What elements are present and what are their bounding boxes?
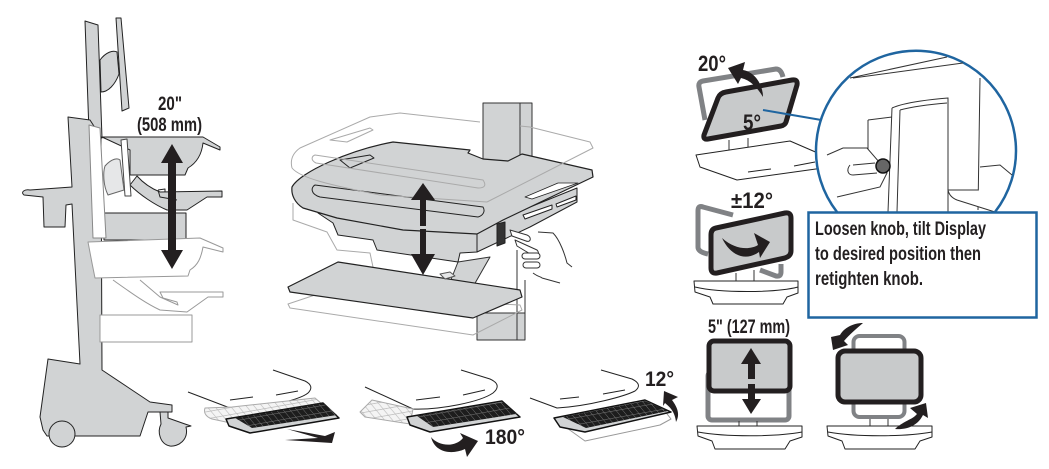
ghost display: [708, 372, 789, 420]
panel: tray height adjustment: [288, 103, 593, 340]
instruction text: [815, 219, 986, 290]
shelf: [696, 141, 827, 180]
shelf: [697, 426, 802, 449]
arrow: up down: [741, 348, 761, 414]
arrow: tilt: [728, 62, 763, 97]
hand on knob: [827, 148, 887, 197]
arrow: tray height: [411, 183, 435, 275]
shelf: [694, 281, 798, 304]
white mast highlight: [89, 125, 106, 238]
ghost keyboard: [360, 400, 413, 424]
magnifier circle: [816, 51, 1016, 212]
display: [838, 351, 921, 402]
panel: display height: [697, 317, 802, 449]
arrow: rotate upper: [831, 323, 863, 350]
arrow: tilt: [663, 391, 678, 422]
panel: display swivel: [694, 188, 798, 304]
keys: [563, 401, 668, 428]
column: [477, 103, 532, 340]
desk edge: [365, 370, 497, 409]
arrow: swivel: [722, 233, 770, 258]
display: [709, 341, 790, 391]
instruction text: to desired position then: [815, 244, 981, 265]
label: 20 inch travel: 20": [158, 94, 182, 115]
keyboard tray: [407, 401, 520, 432]
label: plus minus 12 degrees: ±12°: [731, 188, 773, 213]
panel: knob detail callout: [763, 51, 1036, 317]
post: [739, 421, 757, 426]
posts: [870, 419, 888, 426]
upper tray position: [102, 137, 220, 175]
panel: display tilt: [696, 51, 827, 180]
label: 180 degrees: 180°: [485, 426, 525, 449]
label: 5 degrees: 5°: [743, 110, 761, 135]
arm: [450, 257, 490, 285]
main work surface: [292, 142, 593, 234]
tray underside: [318, 213, 480, 262]
release handle: [497, 222, 505, 246]
label: 20 degrees: 20°: [698, 51, 726, 76]
instruction box: [808, 212, 1036, 318]
knob: [876, 159, 890, 173]
ghost keyboard: [205, 398, 322, 425]
keyboard shelf ghost: [288, 295, 522, 335]
ghost upper tray: [291, 113, 593, 202]
ghost display: [699, 69, 783, 120]
arrow: slide: [285, 429, 335, 443]
arrow: tray height: [161, 144, 183, 269]
panel: keyboard rotate: [360, 370, 525, 457]
hand: [510, 230, 572, 283]
instruction text: retighten knob.: [815, 269, 923, 290]
desk edge: [530, 370, 638, 408]
panel: keyboard tilt: [530, 368, 678, 441]
panel: cart side view: [23, 18, 223, 447]
label: 5 inch travel: 5" (127 mm): [708, 317, 790, 338]
panel: keyboard slide: [188, 370, 339, 443]
keyboard shelf: [288, 262, 522, 318]
keys: [235, 403, 337, 428]
front handle slot: [312, 185, 484, 217]
ghost display: [854, 336, 904, 417]
arrow: rotate: [431, 433, 478, 457]
other hand: [948, 165, 1012, 212]
panel: display rotation: [827, 323, 932, 449]
display: [711, 213, 791, 273]
shelf: [827, 426, 932, 449]
ghost display: [698, 206, 781, 276]
leader line: [763, 110, 833, 122]
label: 508 mm: (508 mm): [137, 115, 202, 136]
ghost keyboard outline: [560, 410, 671, 441]
cart parts: [850, 57, 980, 212]
desk edge: [188, 370, 311, 408]
keys: [417, 402, 517, 427]
label: 12 degrees: 12°: [645, 368, 674, 391]
arrow: rotate lower: [895, 403, 928, 429]
cart mast and base: [23, 18, 191, 447]
lower ghost tray position: [88, 238, 223, 342]
keyboard tray: [554, 400, 671, 432]
keyboard tray: [226, 403, 339, 433]
display: [704, 80, 797, 139]
posts: [736, 270, 754, 281]
post: [729, 138, 748, 150]
instruction text: Loosen knob, tilt Display: [815, 219, 986, 240]
